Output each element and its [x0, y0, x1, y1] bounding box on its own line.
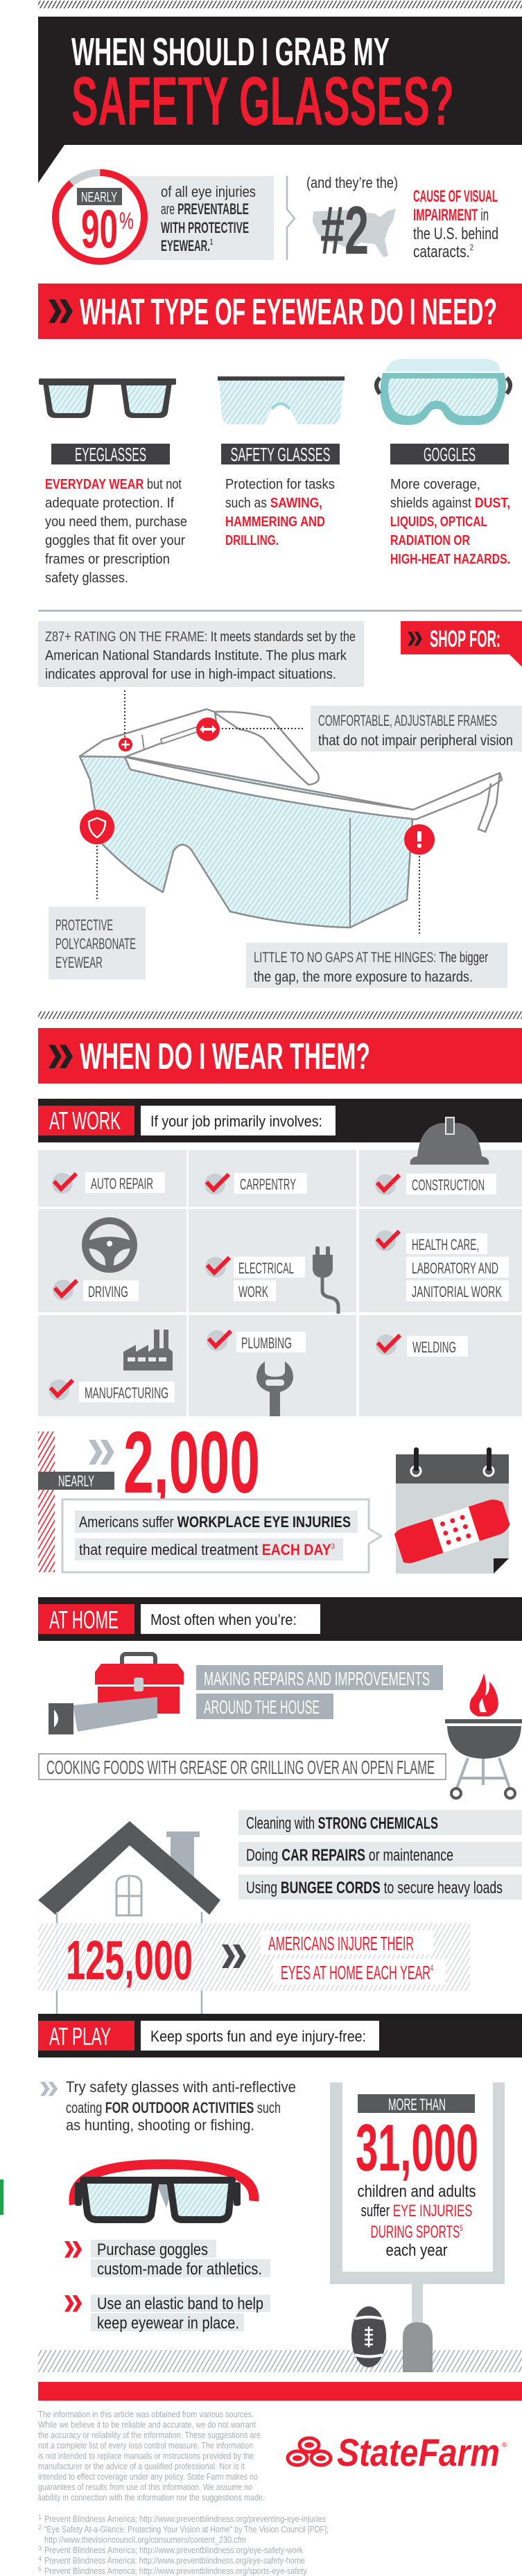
text: footnotes [38, 2514, 329, 2576]
text: disclaimer: While we believe it to be reliable and accurate, we do not warrant [38, 2420, 256, 2430]
icon: shield marker [80, 810, 114, 844]
callout: Z87+ rating: American National Standards Institute. The plus mark [45, 648, 347, 663]
text: footnotes: http://www.thevisioncouncil.org/consumers/content_230.cfm [44, 2535, 246, 2545]
callout: little to no gaps: LITTLE TO NO GAPS AT THE HINGES: The bigger [254, 950, 488, 966]
text: safety glasses description [225, 477, 335, 548]
stat: 125,000 home injuries [38, 1923, 470, 1991]
label: safety glasses: SAFETY GLASSES [230, 444, 330, 465]
sub-header: at home [38, 1597, 522, 1641]
item: driving: DRIVING [88, 1283, 128, 1300]
item: health care [375, 1230, 509, 1301]
text: goggles description: RADIATION OR [390, 533, 470, 548]
stat: #2 cause of visual impairment [306, 174, 498, 268]
header: title panel [38, 17, 522, 183]
text: disclaimer: guarantees of results from use of this information. We assume no [38, 2482, 252, 2492]
list: home hazards [238, 1810, 522, 1899]
text: footnotes: 2 [38, 2524, 42, 2531]
callout: little to no gaps [246, 943, 507, 988]
label: goggles [390, 444, 509, 465]
item: welding [376, 1334, 468, 1357]
item: auto repair [52, 1172, 165, 1194]
text: disclaimer: intended to effect coverage under any policy. State Farm makes no [38, 2472, 258, 2482]
item: plumbing [207, 1330, 306, 1352]
logo: State Farm: ® [502, 2442, 507, 2449]
icon: exclamation marker [404, 824, 435, 855]
section banner: what type of eyewear [38, 284, 522, 339]
callout: little to no gaps: the gap, the more exposure to hazards. [254, 969, 473, 985]
stat: 90% preventable: WITH PROTECTIVE [161, 219, 249, 236]
stat: 90% preventable: of all eye injuries [161, 183, 256, 200]
text: disclaimer: not a complete list of every loss control measure. The information [38, 2441, 253, 2451]
tip: outdoor activities: as hunting, shooting or fishing. [66, 2116, 254, 2134]
text: eyeglasses description: safety glasses. [45, 571, 128, 586]
stat: goal post 31,000 sports injuries: 5 [460, 2223, 463, 2233]
text: footnotes: Prevent Blindness America; http://www.preventblindness.org/sports-eye-safety [44, 2566, 308, 2576]
item: carpentry: CARPENTRY [240, 1176, 296, 1193]
stat: 2,000 workplace injuries: NEARLY [58, 1472, 94, 1490]
stat: goal post 31,000 sports injuries [330, 2082, 505, 2372]
grid: jobs [38, 1117, 522, 1416]
tip: outdoor activities: Try safety glasses with anti-reflective [66, 2078, 296, 2096]
item: construction [375, 1174, 496, 1195]
icon: factory [123, 1330, 173, 1370]
stat: #2 cause of visual impairment: (and they’re the) [306, 174, 398, 191]
text: eyeglasses description: frames or prescription [45, 552, 170, 567]
stat: 125,000 home injuries: 4 [430, 1963, 433, 1973]
stat: #2 cause of visual impairment: #2 [320, 192, 369, 268]
logo: State Farm: StateFarm [337, 2430, 500, 2474]
text: disclaimer: is not intended to replace manuals or instructions provided by the [38, 2451, 254, 2461]
item: manufacturing: MANUFACTURING [85, 1384, 168, 1402]
callout: comfortable frames [311, 706, 522, 751]
text: disclaimer: The information in this article was obtained from various sources. [38, 2410, 254, 2419]
sub-header: at play [38, 2014, 522, 2057]
label: making repairs [196, 1665, 443, 1719]
stat: 90% preventable: EYEWEAR. [161, 237, 242, 254]
stat: 2,000 workplace injuries: 3 [331, 1542, 335, 1551]
text: disclaimer: liability in connection with the information nor the suggestions made. [38, 2493, 265, 2503]
text: footnotes: Prevent Blindness America; http://www.preventblindness.org/preventing-eye-injuries [44, 2514, 326, 2524]
stat: 90% preventable: NEARLY [81, 190, 117, 205]
item: carpentry [205, 1173, 307, 1194]
text: footnotes: 5 [38, 2566, 42, 2573]
green edge mark [0, 2179, 3, 2215]
label: eyeglasses [51, 444, 170, 465]
text: eyeglasses description: adequate protection. If [45, 496, 174, 511]
text: eyeglasses description: EVERYDAY WEAR but not [45, 477, 182, 492]
connector: dotted lines [97, 690, 419, 934]
text: goggles description: LIQUIDS, OPTICAL [390, 514, 487, 530]
text: disclaimer: manufacturer or the advice of a qualified professional. Nor is it [38, 2462, 245, 2471]
text: disclaimer: the accuracy or reliability of the information. These suggestions are [38, 2430, 261, 2440]
decorative bottom hatch band [38, 2350, 522, 2372]
stat: 90% preventable: % [119, 208, 134, 234]
tag: shop for [401, 621, 522, 667]
tip: elastic band: keep eyewear in place. [97, 2314, 239, 2333]
item: manufacturing [49, 1380, 175, 1402]
icon: house [38, 1821, 220, 2014]
stat: goal post 31,000 sports injuries: each year [385, 2241, 448, 2260]
section banner: when do I wear them [38, 1028, 522, 1084]
callout: Z87+ rating: indicates approval for use in high-impact situations. [45, 667, 336, 682]
illustration: safety glasses diagram [80, 709, 502, 928]
stat: 90% preventable: are PREVENTABLE [161, 200, 249, 218]
item: electrical work: WORK [238, 1283, 268, 1300]
stat: goal post 31,000 sports injuries: suffer EYE INJURIES [360, 2202, 473, 2220]
text: disclaimer [38, 2410, 265, 2503]
tip: purchase goggles [64, 2240, 270, 2279]
stat: goal post 31,000 sports injuries: children and adults [358, 2182, 476, 2201]
tip: elastic band: Use an elastic band to help [97, 2295, 263, 2313]
item: electrical work: ELECTRICAL [238, 1260, 294, 1277]
icon: plug [313, 1246, 338, 1314]
sub-header: at home: AT HOME [49, 1605, 119, 1634]
text: safety glasses description: HAMMERING AND [225, 514, 325, 530]
stat: 90% preventable: 1 [210, 237, 213, 247]
callout: protective polycarbonate: POLYCARBONATE [55, 935, 136, 952]
tip: elastic band [64, 2295, 270, 2333]
stat: goal post 31,000 sports injuries: MORE THAN [388, 2096, 446, 2114]
tip: outdoor activities: coating FOR OUTDOOR ACTIVITIES such [66, 2099, 281, 2116]
list: home hazards: Doing CAR REPAIRS or maintenance [246, 1846, 453, 1865]
tip: outdoor activities [40, 2078, 296, 2134]
label: eyeglasses: EYEGLASSES [75, 444, 146, 465]
icon: calendar with bandage [394, 1447, 510, 1574]
sub-header: at work [38, 1099, 522, 1142]
divider chevron [287, 176, 295, 260]
label: safety glasses [221, 444, 340, 465]
sub-header: at work: If your job primarily involves: [150, 1113, 322, 1130]
text: goggles description: More coverage, [390, 477, 480, 492]
footer red bar [38, 2382, 522, 2401]
stat: 2,000 workplace injuries [38, 1413, 381, 1572]
text: goggles description: shields against DUST, [390, 496, 510, 511]
text: footnotes: “Eye Safety At-a-Glance: Protecting Your Vision at Home” by The Vision Council [PDF]; [44, 2525, 329, 2534]
callout: protective polycarbonate [49, 907, 146, 980]
icon: football [351, 2306, 386, 2367]
stat: 2,000 workplace injuries: Americans suffer WORKPLACE EYE INJURIES [79, 1513, 351, 1531]
icon: adjustable arrow marker [196, 717, 220, 741]
text: safety glasses description: DRILLING. [225, 533, 279, 548]
stat: #2 cause of visual impairment: cataracts. [413, 243, 485, 261]
text: eyeglasses description: you need them, purchase [45, 514, 187, 530]
item: auto repair: AUTO REPAIR [91, 1175, 153, 1192]
callout: Z87+ rating [38, 621, 364, 687]
stat: 2,000 workplace injuries: that require medical treatment EACH DAY [79, 1541, 340, 1558]
item: driving [53, 1280, 139, 1301]
text: safety glasses description: Protection for tasks [225, 477, 335, 492]
item: plumbing: PLUMBING [241, 1334, 292, 1352]
item: welding: WELDING [412, 1339, 456, 1356]
icon: safety glasses [218, 376, 345, 424]
stat: 90% preventable: 90 [81, 198, 118, 259]
text: footnotes: 4 [38, 2555, 42, 2562]
list: home hazards: Cleaning with STRONG CHEMICALS [246, 1814, 438, 1833]
stat: 2,000 workplace injuries: 2,000 [123, 1413, 260, 1511]
stat: #2 cause of visual impairment: IMPAIRMENT in [413, 206, 489, 225]
tip: purchase goggles: Purchase goggles [97, 2240, 208, 2259]
stat: 90% preventable [37, 155, 274, 279]
text: goggles description [390, 477, 510, 567]
stat: #2 cause of visual impairment: 2 [470, 243, 473, 252]
text: footnotes: Prevent Blindness America: http://www.preventblindness.org/eye-safety-home [44, 2556, 305, 2566]
icon: hard hat [410, 1117, 489, 1165]
callout: protective polycarbonate: EYEWEAR [55, 954, 103, 971]
item: electrical work [205, 1257, 305, 1301]
text: safety glasses description: such as SAWING, [225, 496, 322, 511]
text: footnotes: 1 [38, 2514, 42, 2521]
icon: steering wheel [85, 1221, 134, 1269]
text: eyeglasses description: goggles that fit over your [45, 533, 185, 548]
text: footnotes: 3 [38, 2545, 42, 2552]
stat: 125,000 home injuries: 125,000 [66, 1929, 193, 1991]
stat: 125,000 home injuries: AMERICANS INJURE THEIR [268, 1933, 414, 1954]
icon: grill with flame [445, 1673, 522, 1798]
callout: protective polycarbonate: PROTECTIVE [55, 916, 113, 934]
sub-header: at home: Most often when you’re: [150, 1611, 297, 1628]
decorative top hatch stripe [38, 1, 522, 8]
label: making repairs: AROUND THE HOUSE [204, 1696, 320, 1718]
sub-header: at work: AT WORK [49, 1106, 121, 1135]
sub-header: at play: Keep sports fun and eye injury-free: [150, 2028, 366, 2045]
label: goggles: GOGGLES [424, 444, 476, 465]
icon: goggles [376, 359, 510, 425]
callout: Z87+ rating: Z87+ RATING ON THE FRAME: It meets standards set by the [45, 629, 356, 645]
stat: goal post 31,000 sports injuries: DURING SPORTS [370, 2222, 514, 2242]
tip: purchase goggles: custom-made for athletics. [97, 2260, 262, 2279]
item: health care: HEALTH CARE, [412, 1236, 479, 1253]
text: eyeglasses description [45, 477, 187, 586]
icon: wrench [256, 1361, 293, 1416]
icon: plus marker [119, 738, 132, 751]
icon: eyeglasses [39, 378, 176, 418]
text: footnotes: Prevent Blindness America; http://www.preventblindness.org/eye-safety-work [44, 2545, 304, 2555]
sub-header: at play: AT PLAY [49, 2022, 111, 2051]
icon: toolbox and saw [49, 1654, 184, 1734]
icon: sports goggles [73, 2164, 254, 2220]
